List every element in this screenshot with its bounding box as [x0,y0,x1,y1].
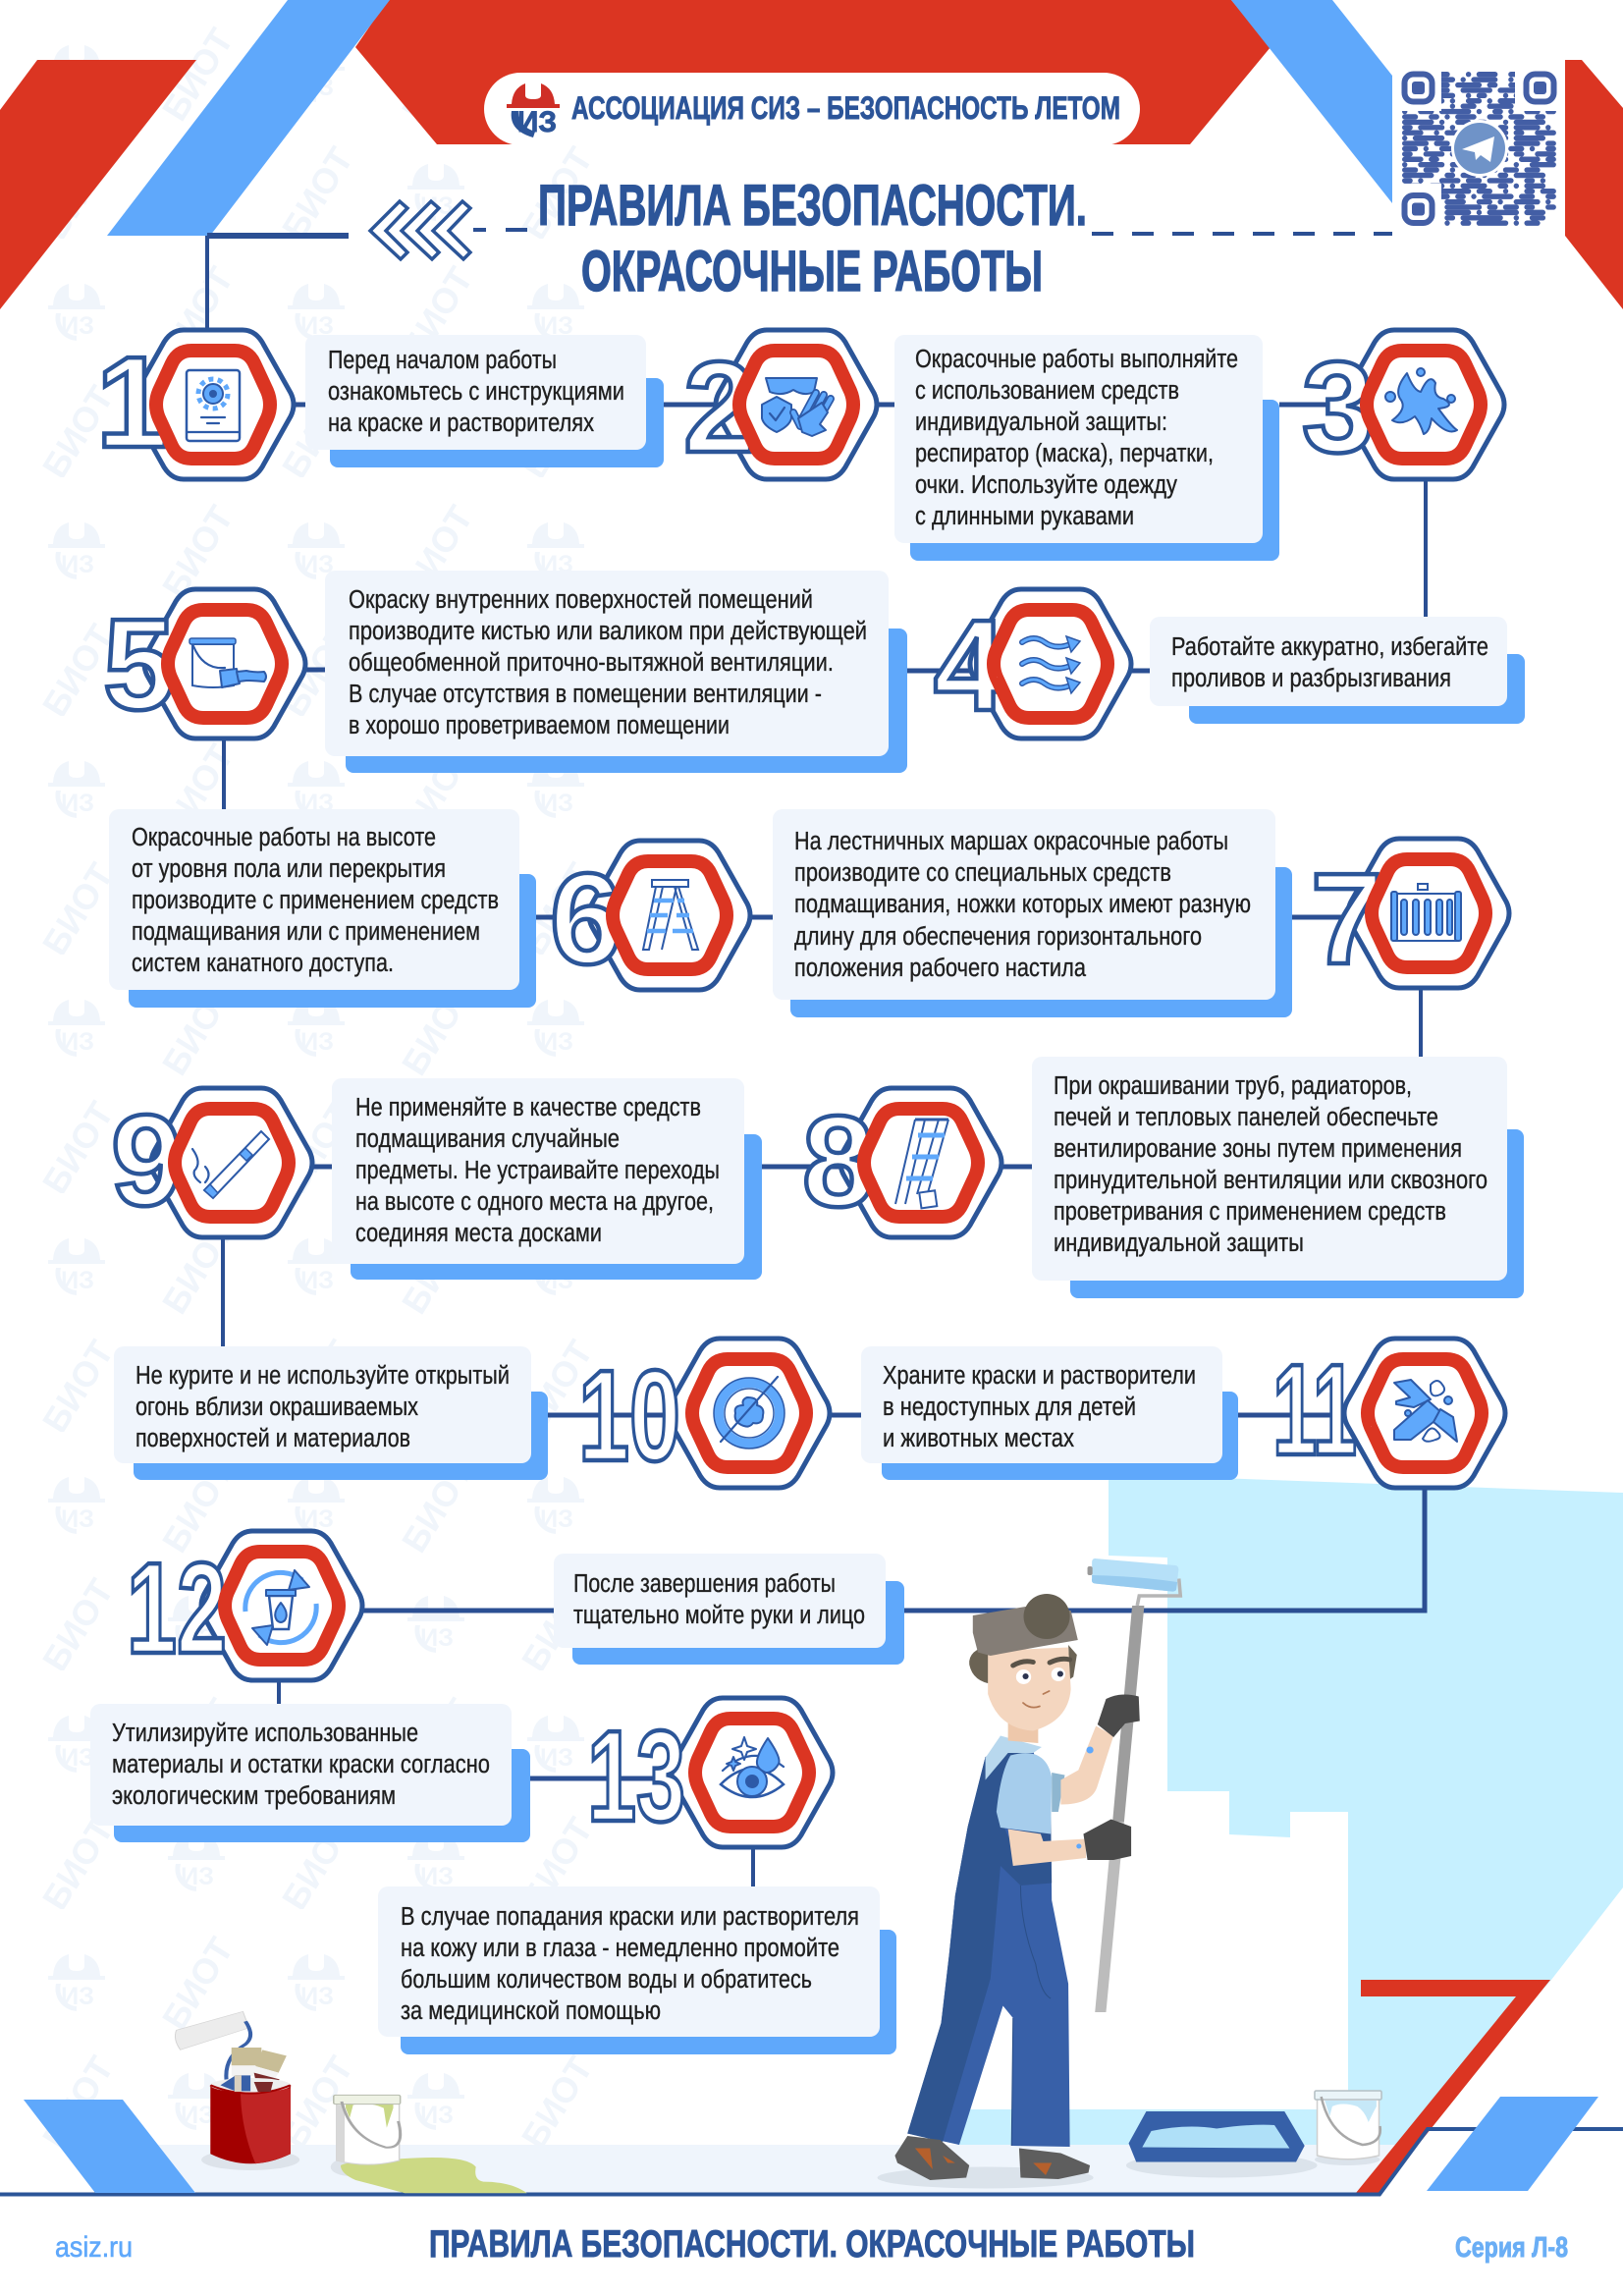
title: ОКРАСОЧНЫЕ РАБОТЫ [581,240,1043,303]
card 2 [894,335,1279,561]
card 3: Работайте аккуратно, избегайте [1171,633,1488,661]
head [969,1594,1078,1743]
card 5: производите кистью или валиком при действующей [349,618,867,645]
step 10 [578,1339,830,1488]
icon: radiator [1391,884,1461,941]
card 14: на кожу или в глаза - немедленно промойте [401,1935,839,1962]
card 12: После завершения работы [573,1570,836,1598]
white bucket with green paint [331,2095,527,2193]
card 9: соединяя места досками [355,1220,602,1247]
gloves [1083,1695,1140,1860]
card 10: огонь вблизи окрашиваемых [135,1394,418,1421]
icon: manual with gear [187,370,240,441]
card 1: ознакомьтесь с инструкциями [328,378,624,406]
icon: recycling bucket [245,1570,316,1645]
card 2: очки. Используйте одежду [915,471,1177,499]
logo [507,83,560,138]
card 7: производите со специальных средств [794,859,1171,887]
title arrows [370,201,470,259]
card 8: индивидуальной защиты [1054,1230,1304,1257]
icon: paint splash [1385,368,1457,434]
step 7: 7 [1311,847,1382,991]
step 8: 8 [802,1089,874,1233]
card 13: материалы и остатки краски согласно [112,1751,490,1778]
card 12 [554,1554,904,1665]
card 7: подмащивания, ножки которых имеют разную [794,891,1251,918]
card 7: положения рабочего настила [794,955,1087,982]
title: ПРАВИЛА БЕЗОПАСНОСТИ. [538,174,1087,238]
step 9 [111,1088,312,1237]
card 2: с использованием средств [915,377,1179,405]
card 5 [325,571,907,773]
card 14 [378,1886,896,2054]
card 8: печей и тепловых панелей обеспечьте [1054,1104,1438,1131]
card 5: общеобменной приточно-вытяжной вентиляции. [349,649,834,677]
card 11: Храните краски и растворители [883,1362,1196,1390]
card 2: с длинными рукавами [915,503,1134,530]
header decoration: right red stripe [1565,60,1623,309]
icon: eye and water drop [721,1737,784,1797]
header text: АССОЦИАЦИЯ СИЗ – БЕЗОПАСНОСТЬ ЛЕТОМ [571,90,1120,126]
floor [147,2145,1417,2193]
step 12 [127,1531,362,1680]
card 9: Не применяйте в качестве средств [355,1094,701,1121]
roller [175,2011,249,2050]
arms [1008,1726,1113,1866]
step 2: 2 [683,335,755,479]
bottom line [0,2129,1623,2194]
footer title: ПРАВИЛА БЕЗОПАСНОСТИ. ОКРАСОЧНЫЕ РАБОТЫ [429,2223,1195,2266]
card 1 [305,335,664,467]
card 13: Утилизируйте использованные [112,1720,418,1747]
step 3: 3 [1302,335,1374,479]
step 1 [96,330,294,479]
icon: ventilation air flows [1022,636,1080,693]
connector lines [207,230,1426,1886]
card 7 [773,809,1292,1017]
boots [894,2136,1090,2180]
card 11 [861,1346,1238,1480]
website: asiz.ru [55,2231,133,2264]
step 13 [587,1698,833,1848]
step 11: 11 [1272,1338,1357,1482]
step 4: 4 [934,593,1005,738]
step 5 [103,589,305,738]
card 2: Окрасочные работы выполняйте [915,346,1238,373]
step 6: 6 [550,847,622,991]
card 8 [1032,1057,1524,1298]
painter illustration [878,1558,1180,2188]
card 6: от уровня пола или перекрытия [132,855,446,883]
step 8 [802,1088,1001,1237]
bottom left blue parallelogram [24,2100,195,2193]
icon: cigarette with smoke [192,1131,269,1198]
brushes [232,2048,261,2065]
paint tray [1126,2111,1318,2178]
step 9: 9 [111,1088,183,1232]
card 2: индивидуальной защиты: [915,409,1167,436]
card 11: в недоступных для детей [883,1394,1136,1421]
card 5: В случае отсутствия в помещении вентиляции - [349,681,822,708]
icon: paint bucket and brush [189,638,266,687]
card 14: В случае попадания краски или растворителя [401,1903,859,1931]
card 7: длину для обеспечения горизонтального [794,923,1202,951]
card 6 [109,809,536,1008]
step 4 [934,589,1131,738]
card 8: вентилирование зоны путем применения [1054,1135,1462,1163]
header decoration: left blue stripe [107,0,390,236]
card 7: На лестничных маршах окрасочные работы [794,828,1228,855]
card 6: Окрасочные работы на высоте [132,824,436,851]
title [538,174,1087,303]
card 1: на краске и растворителях [328,410,594,437]
step 6 [550,841,750,991]
card 5: Окраску внутренних поверхностей помещений [349,586,813,614]
card 8: проветривания с применением средств [1054,1198,1446,1226]
card 8: принудительной вентиляции или сквозного [1054,1167,1488,1194]
header pill [484,73,1140,145]
card 3: проливов и разбрызгивания [1171,665,1451,692]
card 10: поверхностей и материалов [135,1425,410,1452]
bottom right blue parallelogram [1427,2097,1598,2191]
card 6: систем канатного доступа. [132,950,394,977]
icon: washing hands [1394,1380,1457,1442]
header decoration: top red shape [355,0,1271,144]
step 5: 5 [103,592,175,737]
step 11 [1272,1338,1505,1488]
step 10: 10 [578,1343,680,1488]
card 9: подмащивания случайные [355,1125,620,1153]
step 2 [683,330,877,479]
card 13: экологическим требованиям [112,1782,396,1810]
step 13: 13 [587,1704,685,1848]
header decoration: right blue stripe [1231,0,1392,203]
card 13 [90,1704,530,1842]
card 8: При окрашивании труб, радиаторов, [1054,1072,1412,1100]
step 7 [1311,839,1509,991]
card 6: подмащивания или с применением [132,918,480,946]
card 9: предметы. Не устраивайте переходы [355,1157,720,1184]
painted wall [957,1474,1623,2145]
card 9: на высоте с одного места на другое, [355,1188,714,1216]
card 3 [1150,617,1525,724]
pole and roller [1088,1558,1180,2012]
card 11: и животных местах [883,1425,1074,1452]
footer [55,2223,1568,2266]
card 14: за медицинской помощью [401,1997,661,2025]
card 6: производите с применением средств [132,887,499,914]
series: Серия Л-8 [1455,2232,1568,2264]
header decoration: left red stripe [0,60,196,309]
icon: stepladder [643,880,698,950]
card 10 [114,1346,548,1480]
icon: goggles, shield and glove [762,378,831,436]
shirt [986,1736,1064,1834]
card 9 [332,1078,762,1280]
card 10: Не курите и не используйте открытый [135,1362,510,1390]
bucket [210,2085,291,2163]
card 5: в хорошо проветриваемом помещении [349,712,730,739]
step 1: 1 [96,330,168,474]
paint puddle [341,2158,527,2193]
white paint bucket [1315,2091,1381,2165]
QR code [1400,70,1558,227]
step 3 [1302,330,1504,479]
logo: ИЗ [517,106,557,138]
card 2: респиратор (маска), перчатки, [915,440,1214,467]
red bucket with brushes [175,2011,299,2170]
card 1: Перед началом работы [328,347,557,374]
step 12: 12 [127,1536,227,1680]
icon: prohibited open fire [714,1377,784,1449]
icon: leaning ladder [895,1120,948,1208]
card 12: тщательно мойте руки и лицо [573,1602,865,1629]
overalls [907,1750,1070,2147]
card 14: большим количеством воды и обратитесь [401,1966,812,1994]
bottom red seven [1356,1980,1550,2193]
